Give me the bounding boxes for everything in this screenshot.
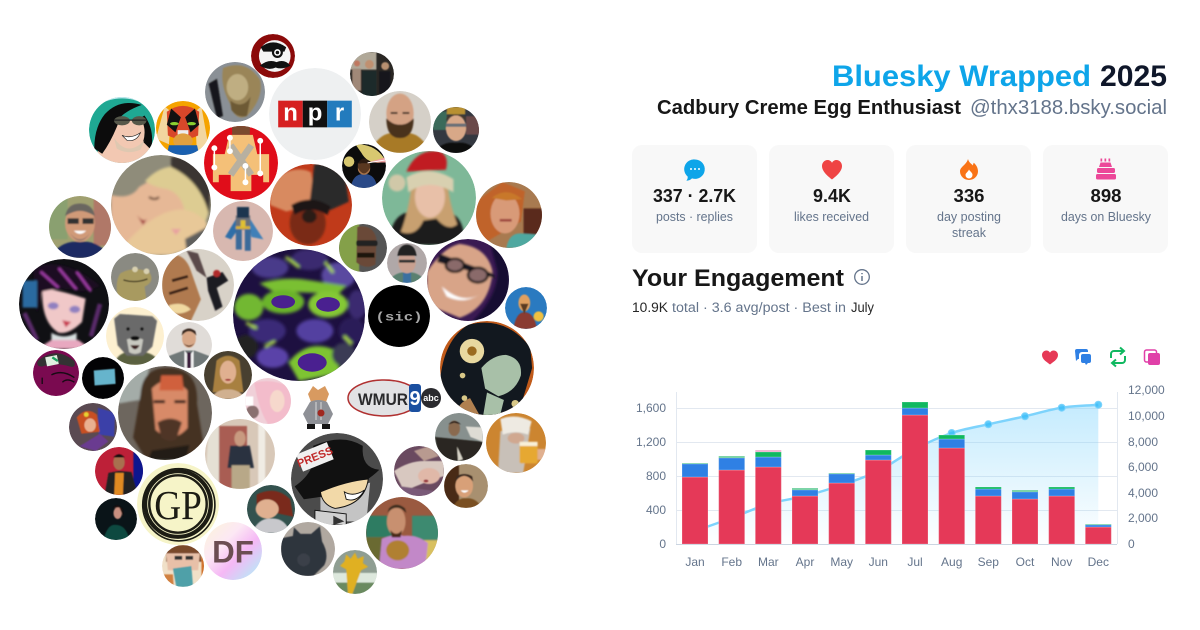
avatar: glowing tv — [82, 357, 124, 399]
heading: Your Engagement: Your Engagement — [632, 265, 844, 292]
month labels: Jul — [907, 555, 923, 569]
month labels: Sep — [978, 555, 999, 569]
avatar: bronze statue — [205, 62, 265, 122]
panel: days on Bluesky — [1043, 145, 1168, 253]
icon: info — [855, 270, 869, 284]
avatar: WMUR 9 abc logo: 9 — [409, 388, 421, 410]
icon: heart — [822, 160, 842, 180]
avatar: grumpy baby — [247, 485, 295, 533]
engagement summary text — [632, 300, 874, 315]
avatar: bald bearded man — [369, 91, 431, 153]
cumulative area and line — [695, 401, 1102, 544]
month labels: Jun — [869, 555, 888, 569]
month labels: May — [830, 555, 853, 569]
avatar: (sic) logo — [368, 285, 430, 347]
avatar: mirror selfie — [205, 419, 275, 489]
icon: chat bubble — [684, 159, 705, 181]
right axis labels: 12,000 — [1128, 383, 1165, 397]
avatar: NPR logo: n — [283, 99, 298, 126]
avatar: NPR logo: r — [335, 99, 344, 126]
avatar: pink-haired woman — [245, 378, 291, 424]
avatar: man in orange shirt — [95, 447, 144, 495]
month labels: Apr — [796, 555, 814, 569]
avatar: Batman figure — [213, 201, 273, 261]
avatar: woman with blonde hair — [204, 351, 252, 399]
engagement chart — [636, 383, 1165, 569]
engagement summary text: July — [851, 300, 874, 315]
left axis labels: 1,600 — [636, 401, 666, 415]
avatar: Brak cartoon — [156, 101, 210, 155]
month labels: Feb — [721, 555, 742, 569]
panel: likes received — [769, 145, 894, 253]
avatar: man with coconut — [366, 497, 441, 569]
avatar: Natty Boh logo — [251, 34, 295, 78]
subtitle: display name and handle: @thx3188.bsky.social — [970, 97, 1167, 119]
avatar: man with sunglasses — [339, 224, 387, 272]
avatar: flower girl illustration — [440, 321, 534, 415]
label: day posting streak — [937, 210, 1001, 240]
avatar: doge in tracksuit — [303, 386, 333, 429]
avatar: WMUR 9 abc logo — [348, 380, 441, 416]
avatar: colorful cartoon lady — [69, 403, 117, 451]
avatar: laser-eyed cartoon — [342, 144, 386, 188]
avatar cluster — [19, 34, 547, 594]
label: day posting streak: streak — [952, 226, 987, 240]
avatar: WMUR 9 abc logo: abc — [423, 393, 439, 403]
chart legend icons — [1042, 348, 1160, 366]
avatar: bear illustration — [106, 307, 164, 365]
icon: quotes legend squares — [1144, 350, 1160, 365]
avatar: upside-down dark face — [270, 164, 352, 246]
icon: replies legend bubbles — [1075, 349, 1091, 365]
avatar: man in suit — [166, 322, 212, 368]
avatar: purple cartoon — [33, 350, 79, 396]
panel: posts and replies — [632, 145, 757, 253]
stat: 337 · 2.7K: 337 · 2.7K — [653, 186, 736, 206]
avatar: woman in dark dress — [95, 498, 137, 540]
avatar: (sic) logo: (sic) — [375, 310, 423, 324]
month labels: Aug — [941, 555, 962, 569]
avatar: smiling man with glasses — [49, 196, 112, 258]
stat: 898: 898 — [1090, 186, 1122, 206]
avatar: smiling man on plane — [444, 464, 488, 508]
stat: 336: 336 — [954, 186, 984, 206]
avatar: Thor illustration — [505, 287, 547, 329]
avatar: long-haired man — [118, 366, 212, 460]
avatar: GP logo: GP — [154, 482, 202, 528]
right axis labels: 10,000 — [1128, 409, 1165, 423]
month labels — [685, 555, 1109, 569]
avatar: GP logo — [137, 463, 219, 545]
stat: 9.4K: 9.4K — [813, 186, 851, 206]
avatar: woman in santa hat — [382, 151, 476, 245]
left axis labels — [636, 401, 666, 551]
avatar: DF donut logo — [204, 522, 262, 580]
right axis labels: 0 — [1128, 537, 1135, 551]
avatar: squinting man with figurine — [162, 249, 234, 321]
avatar: man with glasses, studio — [433, 107, 480, 153]
avatar: manga girl — [19, 259, 109, 349]
left axis labels: 800 — [646, 469, 666, 483]
avatar: Kronk cartoon — [89, 96, 155, 163]
avatar: red crate illustration — [204, 126, 278, 200]
subtitle: display name and handle — [657, 97, 1167, 119]
icon: flame — [960, 159, 978, 180]
avatar: press hat cartoon: PRESS — [296, 445, 335, 470]
panel: day posting streak — [906, 145, 1031, 253]
label: day posting streak: day posting — [937, 210, 1001, 224]
month labels: Mar — [758, 555, 779, 569]
right axis labels: 2,000 — [1128, 511, 1158, 525]
right axis labels — [1128, 383, 1165, 551]
left axis labels: 1,200 — [636, 435, 666, 449]
avatar: NPR logo: p — [308, 99, 322, 126]
label: days on Bluesky: days on Bluesky — [1061, 210, 1152, 224]
month labels: Dec — [1088, 555, 1109, 569]
avatar: black wolf — [281, 522, 335, 576]
avatar: band group photo — [350, 52, 394, 97]
avatar: sun mascot — [333, 550, 377, 594]
avatar: press hat cartoon — [291, 433, 383, 525]
icon: birthday cake — [1096, 158, 1116, 180]
engagement summary text: total · 3.6 avg/post · Best in — [672, 300, 846, 315]
subtitle: display name and handle: Cadbury Creme Egg Enthusiast — [657, 97, 961, 119]
month labels: Jan — [685, 555, 705, 569]
stacked bars — [682, 402, 1111, 544]
avatar: blonde woman lying — [394, 446, 444, 496]
avatar: man in cap — [387, 243, 427, 283]
right axis labels: 8,000 — [1128, 435, 1158, 449]
avatar: NPR logo — [269, 68, 361, 160]
icon: reposts legend arrows — [1111, 348, 1125, 366]
avatar: smiling man in purple light — [427, 239, 509, 321]
avatar: red-haired woman — [476, 182, 543, 248]
avatar: Cadbury Creme Eggs — [233, 249, 366, 381]
avatar: frog — [111, 253, 159, 301]
label: posts · replies: posts · replies — [656, 210, 733, 224]
title: Bluesky Wrapped — [832, 60, 1091, 93]
avatar: wizard with beer — [486, 413, 546, 473]
title: 2025 — [1100, 60, 1167, 93]
avatar: woman hugging cat — [111, 155, 211, 255]
avatar: dark man with blanket — [435, 413, 483, 461]
label: likes received: likes received — [794, 210, 869, 224]
avatar: DF donut logo: DF — [212, 535, 254, 570]
avatar: WMUR 9 abc logo: WMUR — [358, 390, 408, 409]
icon: likes legend heart — [1042, 350, 1058, 364]
engagement summary text: 10.9K — [632, 300, 668, 315]
month labels: Nov — [1051, 555, 1072, 569]
right axis labels: 6,000 — [1128, 460, 1158, 474]
avatar: woman with mug — [162, 545, 206, 587]
left axis labels: 0 — [659, 537, 666, 551]
right axis labels: 4,000 — [1128, 486, 1158, 500]
left axis labels: 400 — [646, 503, 666, 517]
month labels: Oct — [1016, 555, 1035, 569]
